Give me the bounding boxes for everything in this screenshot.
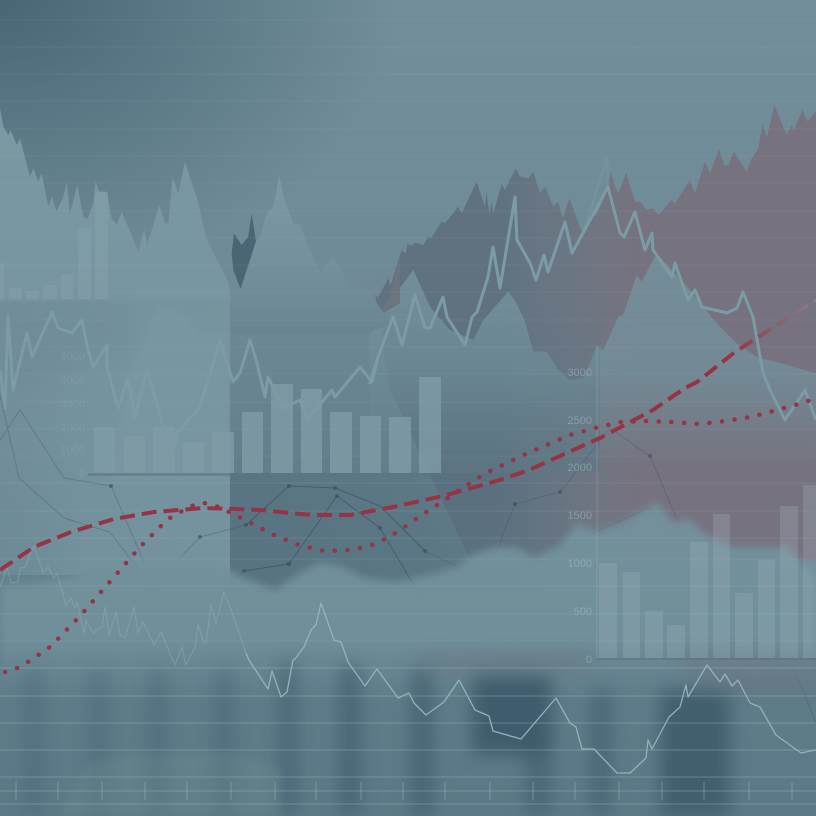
bar chart: left with faint axis labels: 2000 — [61, 422, 85, 434]
grey haze near the lower centre and right — [420, 648, 816, 700]
bar chart: right with axis labels: 0 — [586, 654, 592, 666]
teal area chart on the left — [0, 108, 400, 333]
bar chart: right with axis labels: 1000 — [568, 558, 592, 570]
hazy light area at the left middle — [0, 300, 230, 575]
bar chart: left with faint axis labels: 5000 — [61, 351, 85, 363]
bar chart: left with faint axis labels: 0 — [79, 468, 85, 480]
blurred vertical bars at the bottom — [24, 660, 730, 816]
thin pale line chart at the bottom — [0, 546, 816, 773]
bar chart: left with faint axis labels: 4000 — [61, 375, 85, 387]
mauve area chart on the right — [375, 105, 816, 560]
thick pale line chart — [0, 158, 816, 457]
bar chart: left with faint axis labels: 3000 — [61, 398, 85, 410]
darker panel behind the left bar chart — [230, 300, 600, 593]
red dotted trend line — [5, 398, 816, 672]
bottom fog area chart — [0, 502, 816, 720]
dark sliver behind the teal chart — [232, 213, 256, 289]
thin dark line chart series with markers — [0, 395, 816, 722]
bar chart: right with axis labels — [568, 345, 816, 666]
bar chart: right with axis labels: 2000 — [568, 462, 592, 474]
small bar chart: upper left — [0, 192, 108, 299]
time axis tick marks — [16, 782, 792, 800]
bar chart: left with faint axis labels — [61, 351, 446, 480]
teal hill layer in front of the mauve chart — [370, 253, 816, 467]
bar chart: right with axis labels: 2500 — [568, 415, 592, 427]
bar chart: right with axis labels: 500 — [574, 606, 592, 618]
bar chart: right with axis labels: 3000 — [568, 367, 592, 379]
pale green patch at the bottom left — [60, 752, 282, 816]
bar chart: left with faint axis labels: 1000 — [61, 445, 85, 457]
bar chart: right with axis labels: 1500 — [568, 510, 592, 522]
red dashed trend line — [0, 300, 816, 570]
